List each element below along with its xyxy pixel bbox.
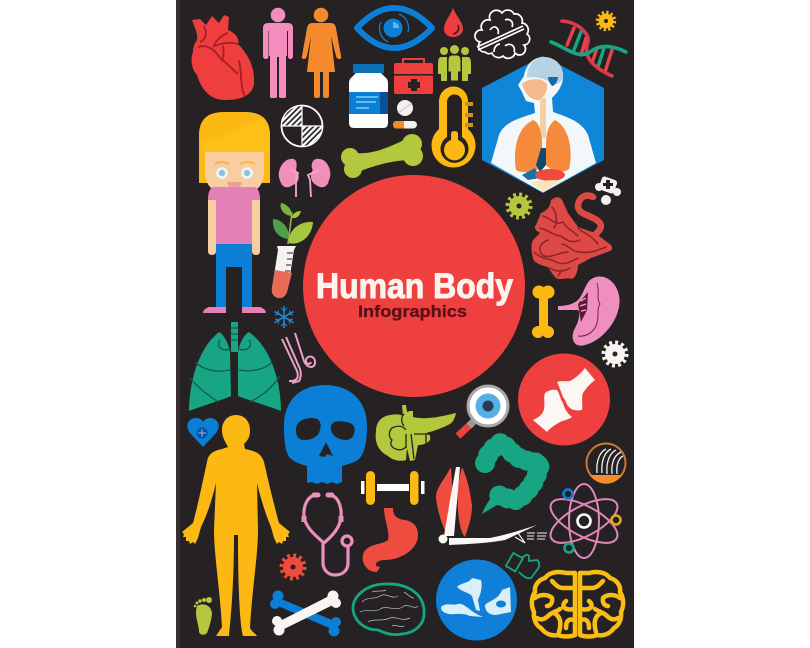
icon: pill and capsule <box>393 100 417 128</box>
icon: teal brain <box>353 584 424 635</box>
icon: female figure <box>302 8 341 98</box>
icon: colon <box>482 442 540 514</box>
icon: male figure <box>263 8 293 98</box>
icon: pancreas <box>376 405 456 461</box>
icon: dumbbell <box>361 471 424 505</box>
left hemisphere <box>532 572 575 636</box>
icon: yellow gear <box>598 12 614 30</box>
icon: DNA helix <box>551 21 626 76</box>
hair <box>199 112 270 183</box>
icon: blood drop <box>444 8 463 37</box>
icon: plant in test tube <box>272 203 313 298</box>
blue bone <box>270 590 341 636</box>
icon: white dice <box>595 176 621 205</box>
icon: heart with plus <box>187 418 219 447</box>
test tube <box>272 246 296 298</box>
icon: stethoscope <box>304 495 352 575</box>
subtitle: Infographics <box>358 302 467 321</box>
icon: green bone <box>341 134 423 178</box>
icon: anatomical heart <box>192 15 254 100</box>
right hemisphere <box>580 572 623 636</box>
icon: snowflake <box>274 306 294 328</box>
icon: atom <box>544 484 624 558</box>
title: Human Body <box>316 267 513 306</box>
icon: medicine bottle <box>349 64 388 128</box>
icon: foot print <box>194 597 212 635</box>
icon: arm muscles and bones <box>436 467 547 545</box>
icon: thumbs up <box>506 553 539 578</box>
icon: eye <box>357 8 432 48</box>
icon: crossed bones <box>270 590 341 636</box>
top and arms <box>212 188 260 198</box>
panel: cartoon girl <box>199 112 270 313</box>
icon: first aid kit <box>394 59 433 94</box>
icon: group of people <box>438 45 471 81</box>
panel: dark cover background <box>176 0 634 648</box>
body silhouette <box>491 57 596 192</box>
icon: joint badge <box>518 354 610 446</box>
icon: thermometer <box>432 86 475 168</box>
icon: magnifying glass with eye <box>458 386 508 436</box>
icon: yellow bone <box>532 286 554 338</box>
panel: respiratory system hexagon <box>482 56 604 193</box>
icon: hair follicle circle <box>586 444 626 484</box>
face <box>205 152 264 195</box>
icon: yellow brain <box>532 572 623 636</box>
icon: lungs <box>189 322 281 411</box>
icon: spleen <box>558 276 620 346</box>
icon: small intestine <box>532 196 612 279</box>
icon: kidneys <box>279 159 330 197</box>
icon: stomach <box>363 508 418 572</box>
icon: red gear <box>282 556 304 578</box>
jeans <box>216 244 252 307</box>
icon: skull <box>284 385 367 484</box>
white bone <box>272 590 341 636</box>
lungs <box>515 120 542 172</box>
icon: hair strands <box>282 333 315 383</box>
icon: hatched pie chart <box>282 106 322 146</box>
icon: blue circle with bones <box>436 560 517 640</box>
icon: red centre circle <box>303 175 525 397</box>
icon: brain outline with strike line <box>475 10 530 58</box>
shoes <box>203 307 266 313</box>
icon: white gear <box>604 342 626 366</box>
icon: human silhouette <box>182 415 290 636</box>
icon: lime gear <box>508 194 530 218</box>
